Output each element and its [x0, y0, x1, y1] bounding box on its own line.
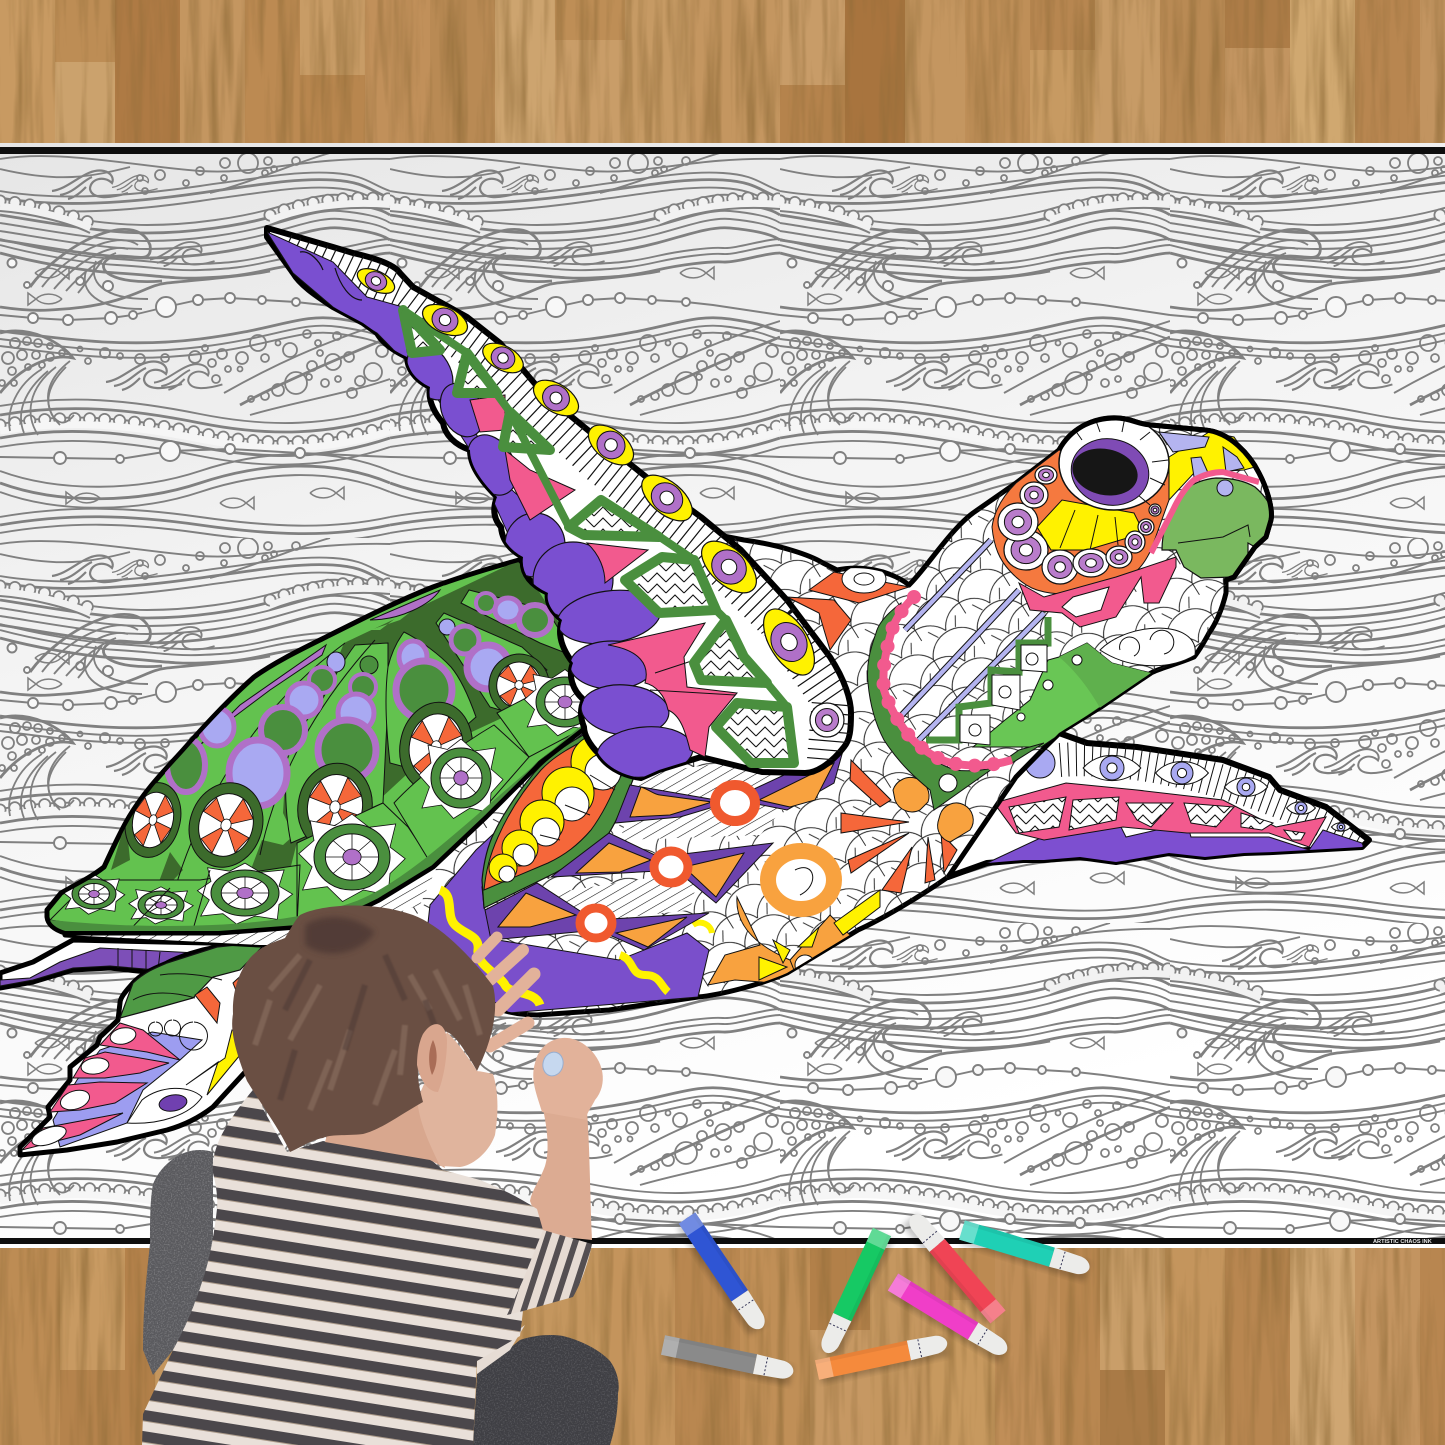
pink panels [587, 543, 648, 583]
wood floor: bottom strip [0, 1245, 1445, 1445]
pink web [994, 783, 1326, 847]
heart ribbon 1 [615, 747, 844, 823]
rear right flipper [948, 733, 1369, 880]
orange oval [482, 733, 634, 908]
green leaf [120, 942, 267, 1018]
orange shoulder [787, 572, 909, 650]
marker: orange [815, 1333, 950, 1384]
lavender field [53, 1032, 202, 1147]
green beak [1151, 472, 1271, 578]
large front flipper [267, 228, 851, 781]
orange fan [841, 760, 957, 893]
shirt [142, 1085, 543, 1445]
hatched leading strip [290, 238, 835, 760]
sleeve [507, 1230, 592, 1315]
pink under jaw [1019, 557, 1176, 627]
head [992, 416, 1271, 627]
hatched band below shell [76, 868, 436, 945]
right leg [473, 1325, 619, 1445]
yellow wavy trim [440, 890, 540, 1005]
top black border [0, 147, 1445, 154]
raised hand fingers [477, 937, 534, 1046]
purple scallop lobes [300, 252, 695, 781]
zigzag [926, 617, 1048, 740]
yellow ribbon [186, 1030, 243, 1095]
head outline [1059, 418, 1271, 580]
orange flower [707, 895, 850, 986]
orange accents [195, 970, 247, 1023]
purple rings around eye [998, 466, 1161, 584]
flipper eye [127, 1088, 202, 1123]
light green petals [286, 643, 388, 843]
dark green rim [50, 725, 590, 931]
eye [1059, 416, 1169, 512]
green netted windows [403, 310, 794, 763]
orange crown [992, 450, 1173, 594]
bottom black border [0, 1238, 1445, 1244]
heart ribbon 3 [485, 883, 709, 950]
lower lobes [296, 802, 417, 850]
turtle illustration [0, 228, 1369, 1155]
hatched band between ribbons [622, 764, 782, 840]
orange wheels [124, 782, 182, 858]
flower rosettes [299, 814, 405, 902]
yellow patch [1037, 500, 1144, 550]
poster paper with wave line art [0, 143, 1445, 1248]
marker: magenta [886, 1273, 1012, 1363]
purple edge strip [200, 645, 326, 745]
purple plastron [425, 730, 709, 1013]
ear [417, 1024, 447, 1092]
writing arm [530, 1105, 592, 1240]
boy colouring the poster [142, 906, 619, 1445]
tail [0, 940, 300, 988]
orange swirl [768, 851, 834, 909]
marker: green [817, 1228, 895, 1358]
bright green neck [973, 643, 1151, 747]
left foot sock [143, 1150, 213, 1375]
purple underside [986, 828, 1364, 863]
neck flaps [1100, 628, 1195, 666]
shell [47, 560, 606, 940]
pink blades [100, 1023, 180, 1060]
petal veins [172, 640, 375, 900]
markers on the floor [660, 1209, 1092, 1386]
face [417, 1032, 497, 1167]
dark green collar [867, 603, 1044, 810]
purple scallop tip [267, 232, 551, 560]
marker: grey [660, 1335, 795, 1386]
pink scallop band [883, 597, 1012, 766]
wood floor: top strip [0, 0, 1445, 145]
hind flipper [20, 942, 267, 1155]
brand credit: ARTISTIC CHAOS INK [1373, 1239, 1432, 1245]
marker: teal [958, 1220, 1092, 1282]
dark green ground [283, 560, 586, 843]
top of head stripes [1169, 432, 1255, 500]
marker: red [901, 1209, 1006, 1326]
lavender neck stripes [900, 540, 1044, 740]
turtle body and neck [60, 418, 1271, 1015]
drawing hand and marker [533, 1038, 603, 1120]
marker: blue [675, 1212, 770, 1336]
heart ribbon 2 [551, 833, 773, 903]
peacock arcs [167, 593, 551, 806]
neck white panel [895, 540, 1060, 745]
yellow crescents [489, 735, 625, 882]
wave pattern [0, 153, 1445, 1238]
neck [325, 1095, 445, 1168]
yellow eyes along flipper edge [354, 263, 844, 737]
hair [232, 906, 495, 1152]
